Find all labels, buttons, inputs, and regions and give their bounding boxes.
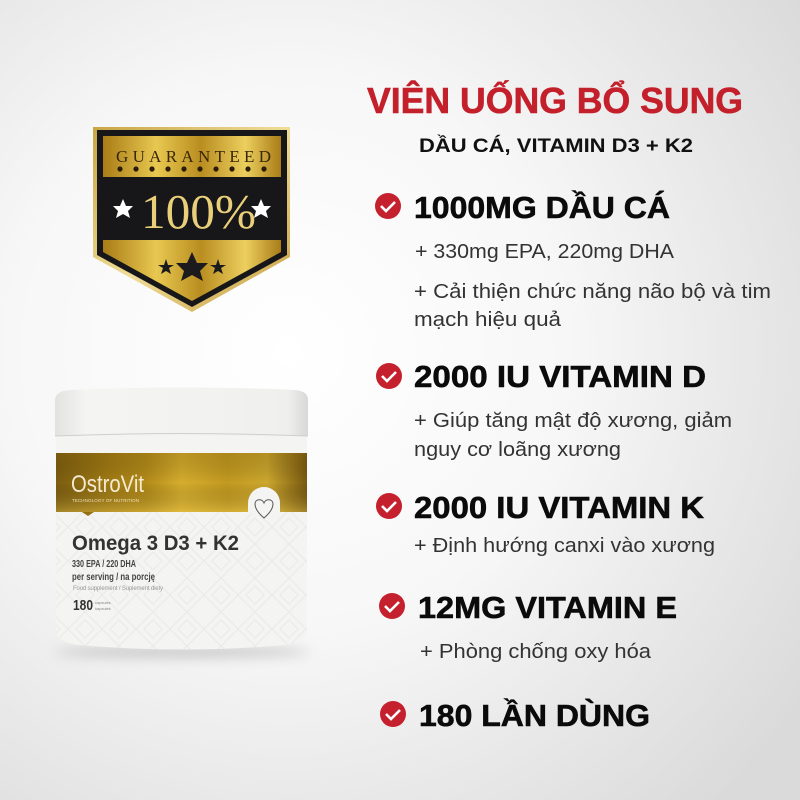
supplement text: Food supplement / Suplement diety bbox=[73, 586, 163, 592]
dosage text: 330 EPA / 220 DHA bbox=[72, 558, 136, 570]
icon: heart bbox=[255, 500, 273, 518]
main heading: VIÊN UỐNG BỔ SUNG bbox=[367, 78, 743, 121]
item heading: 180 LẦN DÙNG bbox=[419, 697, 650, 733]
title bbox=[367, 78, 743, 157]
product name: Omega 3 D3 + K2 bbox=[72, 532, 239, 555]
heart tab bbox=[248, 487, 280, 513]
badge white stars bbox=[113, 199, 271, 218]
item: vitamin K bbox=[376, 490, 715, 557]
brand name: OstroVit bbox=[71, 471, 144, 498]
badge percentage: 100% bbox=[141, 184, 256, 239]
item: vitamin D bbox=[376, 359, 732, 461]
capsule count: 180 bbox=[73, 597, 93, 614]
item text: + 330mg EPA, 220mg DHA bbox=[415, 241, 675, 263]
item text: + Giúp tăng mật độ xương, giảm bbox=[414, 410, 732, 432]
item text: + Phòng chống oxy hóa bbox=[420, 641, 652, 663]
icon: check bbox=[379, 593, 405, 619]
item heading: 1000MG DẦU CÁ bbox=[414, 190, 670, 225]
badge label: GUARANTEED bbox=[116, 147, 271, 166]
icon: check bbox=[376, 363, 402, 389]
icon: check bbox=[376, 493, 402, 519]
item: vitamin E bbox=[379, 590, 677, 663]
subheading: DẦU CÁ, VITAMIN D3 + K2 bbox=[419, 135, 693, 157]
item: 1000mg fish oil: + Cải thiện chức năng não bộ và tim bbox=[414, 281, 771, 303]
icon: check bbox=[375, 193, 401, 219]
gold label band bbox=[56, 453, 307, 516]
product jar: per serving / na porcję bbox=[72, 571, 155, 583]
badge: guaranteed 100% bbox=[93, 127, 290, 312]
item: vitamin D: nguy cơ loãng xương bbox=[414, 439, 621, 461]
item: 180 servings bbox=[380, 697, 650, 733]
badge dots bbox=[117, 166, 267, 172]
item: 1000mg fish oil bbox=[375, 190, 771, 331]
item heading: 2000 IU VITAMIN K bbox=[414, 490, 705, 525]
badge dark stars bbox=[158, 252, 226, 281]
item: 1000mg fish oil: mạch hiệu quả bbox=[414, 309, 562, 331]
product jar bbox=[54, 388, 310, 658]
jar lid bbox=[55, 388, 308, 436]
item heading: 2000 IU VITAMIN D bbox=[414, 359, 706, 394]
item text: + Định hướng canxi vào xương bbox=[414, 535, 715, 557]
jar body bbox=[56, 436, 307, 650]
icon: check bbox=[380, 701, 406, 727]
item heading: 12MG VITAMIN E bbox=[418, 590, 677, 625]
product jar: capsules bbox=[95, 600, 111, 605]
product jar: kapsułek bbox=[95, 606, 111, 611]
product jar: TECHNOLOGY OF NUTRITION bbox=[72, 498, 139, 503]
